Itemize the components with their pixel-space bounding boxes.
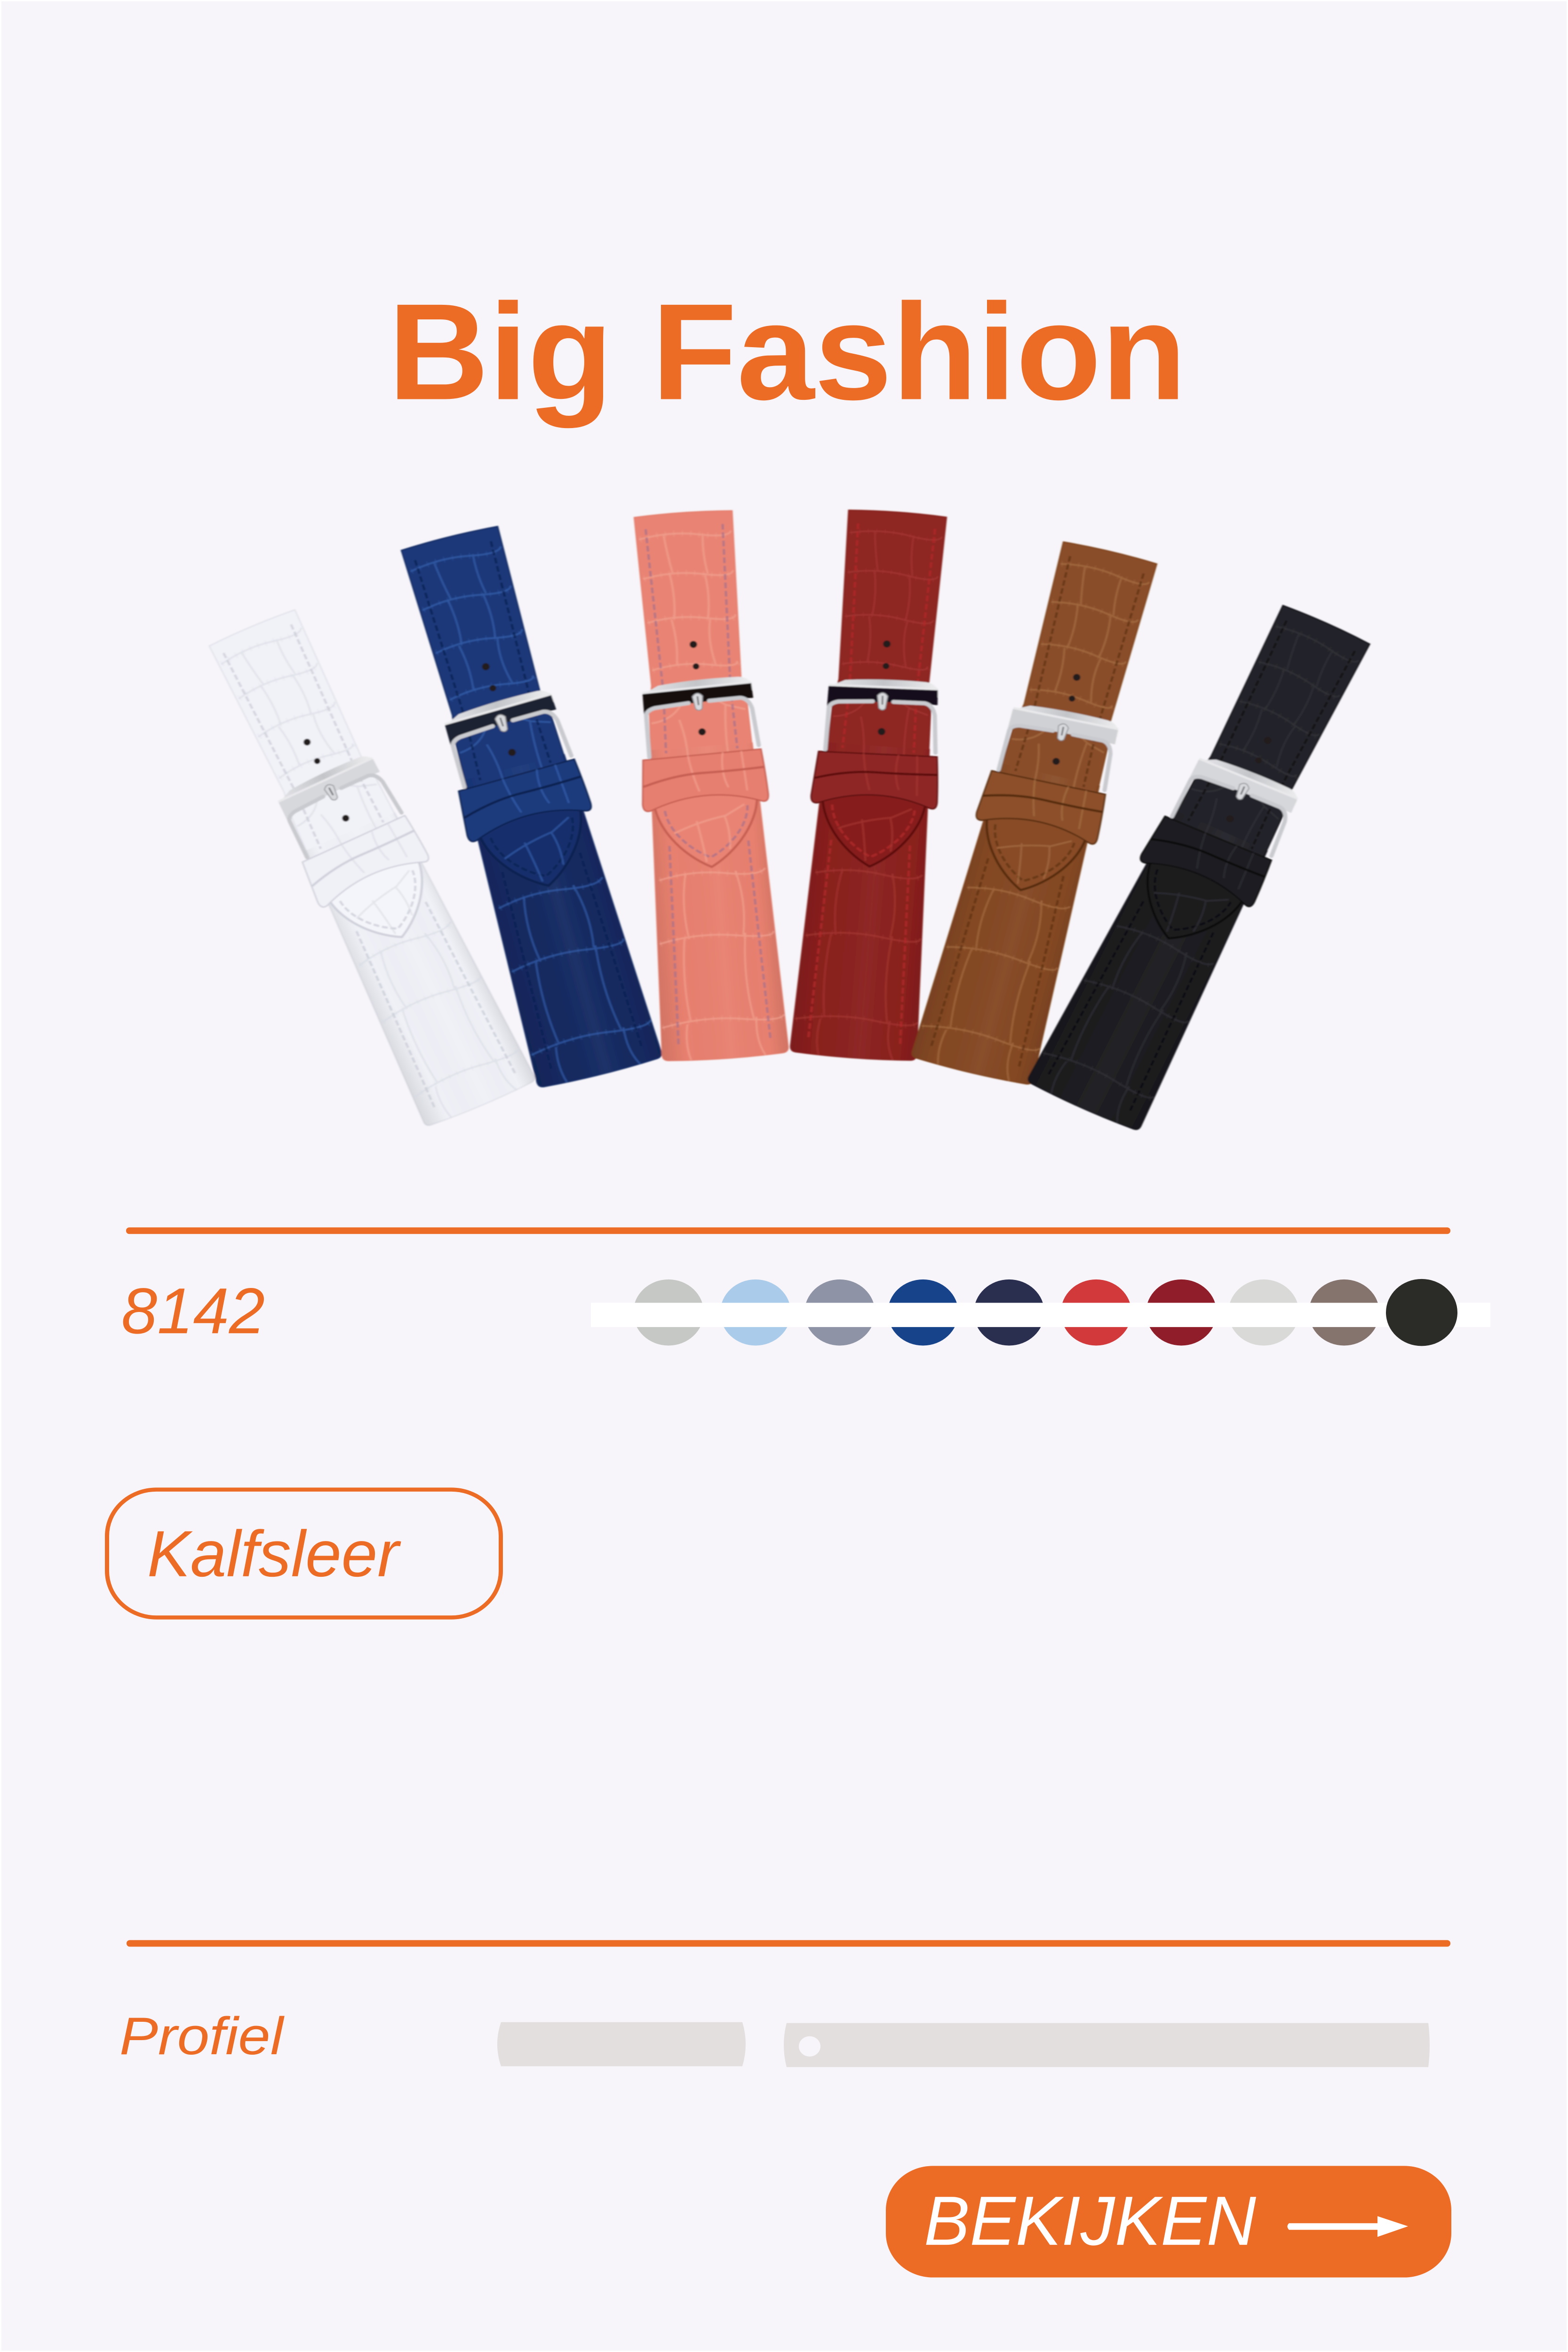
strap profile diagram xyxy=(497,2022,1430,2067)
button background xyxy=(886,2166,1451,2278)
swatch: burgundy xyxy=(1146,1279,1217,1345)
profile: hole xyxy=(799,2036,820,2057)
top divider xyxy=(126,1227,1450,1234)
swatch: light grey xyxy=(633,1279,704,1345)
strap: salmon pink xyxy=(620,509,788,1063)
material tag xyxy=(107,1490,501,1617)
swatch: royal blue xyxy=(888,1279,958,1345)
icon: arrow xyxy=(1287,2216,1408,2237)
bottom divider xyxy=(127,1940,1450,1947)
button xyxy=(886,2166,1451,2278)
swatch: navy xyxy=(974,1279,1044,1345)
product photo: fan of six watch straps xyxy=(196,508,1383,1133)
strap: black xyxy=(1026,599,1383,1133)
profile: short piece xyxy=(497,2022,746,2066)
title: Big Fashion xyxy=(388,275,1186,429)
strap: cognac brown xyxy=(911,537,1170,1087)
tag outline xyxy=(107,1490,501,1617)
white band across swatches xyxy=(591,1303,1490,1327)
profile label: Profiel xyxy=(119,2007,285,2066)
swatch: blue grey xyxy=(804,1279,875,1345)
swatch: red xyxy=(1061,1279,1131,1345)
swatch: pale grey xyxy=(1228,1279,1299,1345)
strap: navy blue xyxy=(387,522,663,1089)
swatch: black xyxy=(1386,1279,1457,1346)
strap: white xyxy=(196,603,537,1128)
button label: BEKIJKEN xyxy=(924,2182,1256,2260)
swatch: taupe xyxy=(1309,1279,1379,1345)
tag label: Kalfsleer xyxy=(147,1518,401,1590)
strap: dark red xyxy=(790,508,961,1062)
model number: 8142 xyxy=(121,1275,265,1347)
colour swatches xyxy=(591,1279,1490,1346)
profile: long piece xyxy=(784,2023,1430,2067)
swatch: light blue xyxy=(720,1279,791,1345)
